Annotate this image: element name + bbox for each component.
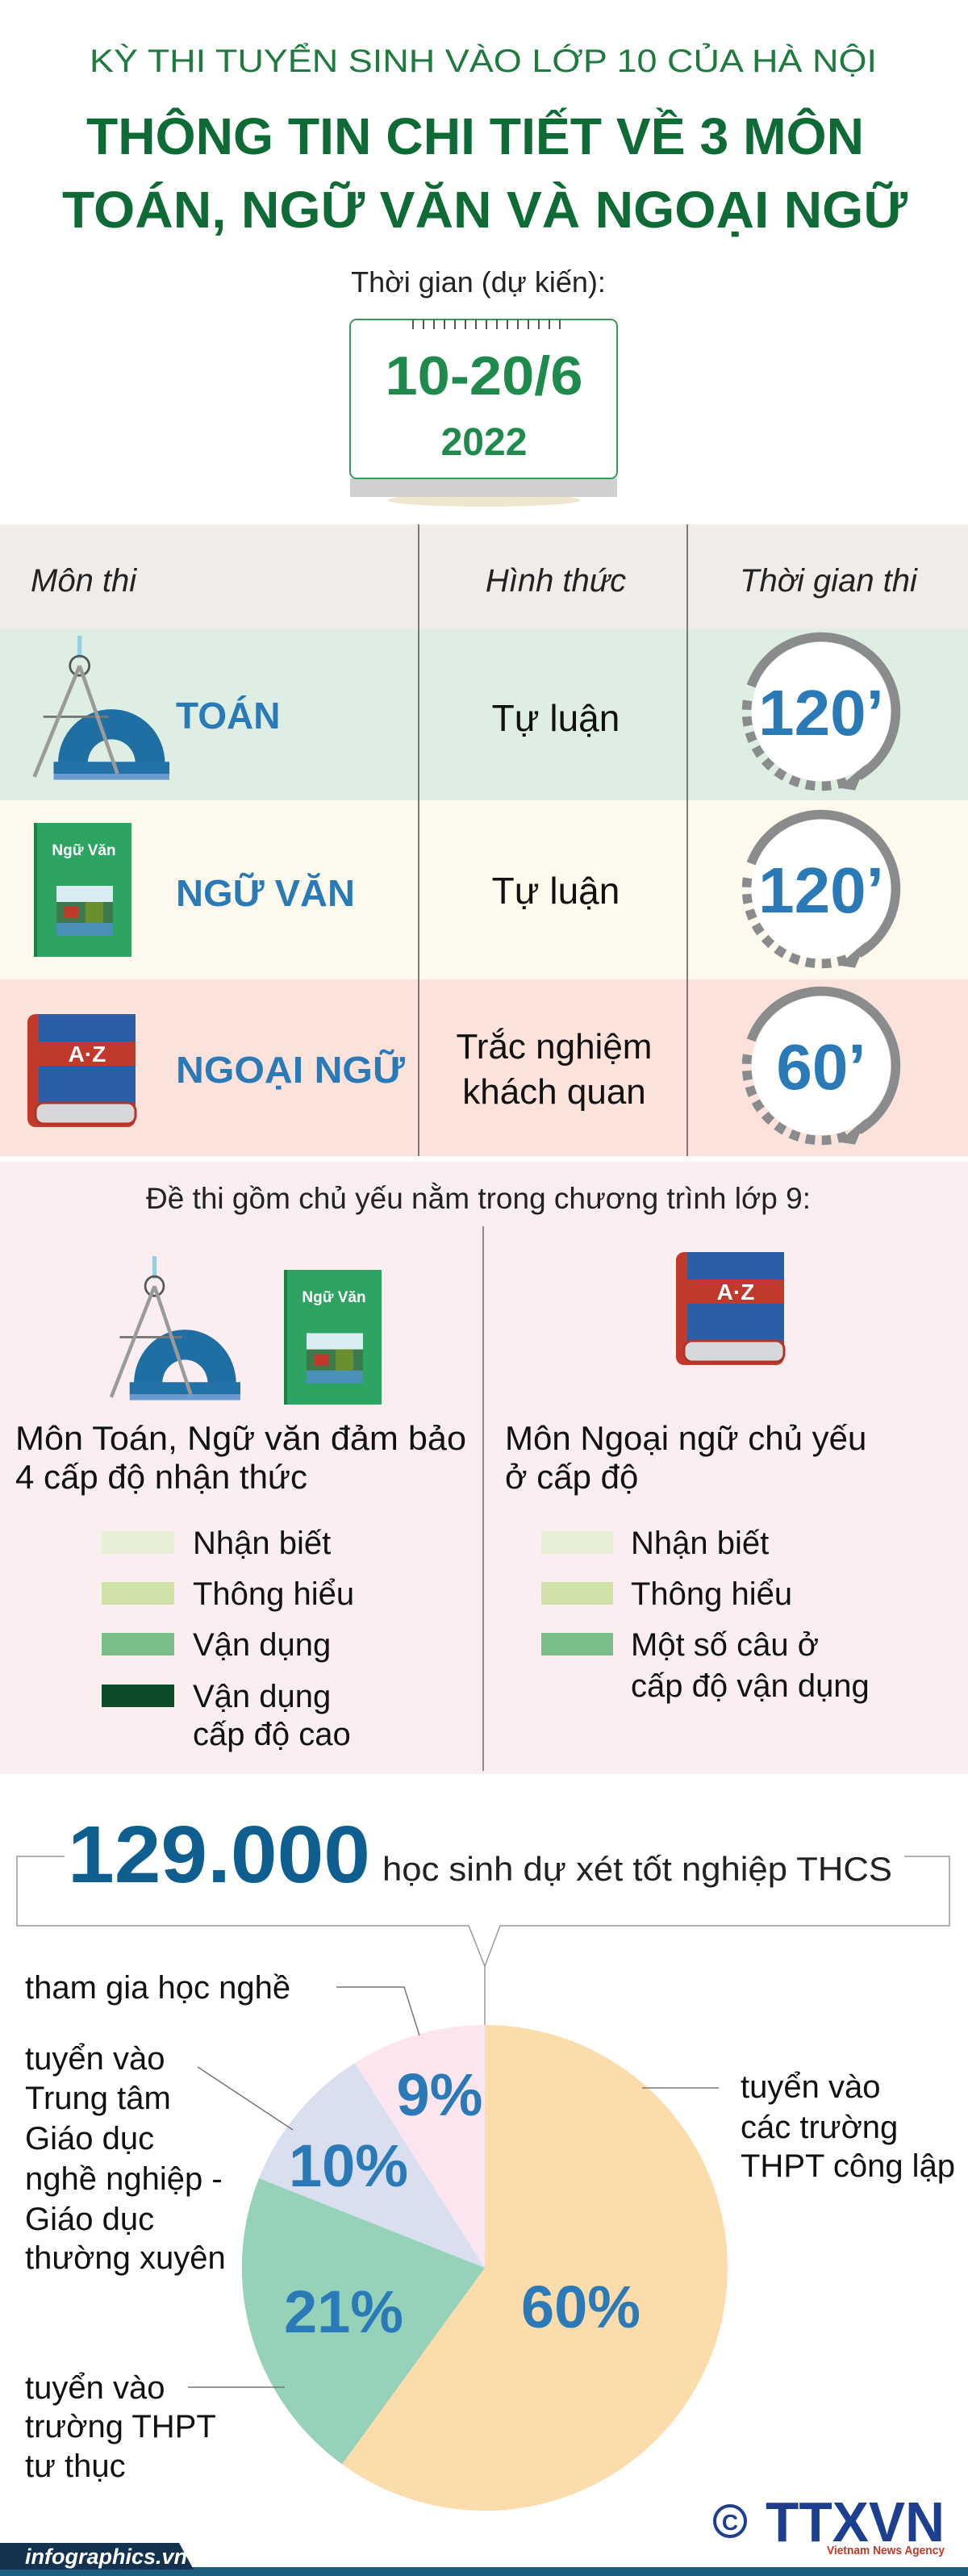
pie labels: [25, 1970, 955, 2484]
calendar: [350, 319, 617, 507]
table: [0, 524, 968, 1156]
pie chart: [242, 2025, 728, 2511]
title: TOÁN, NGỮ VĂN VÀ NGOẠI NGỮ: [62, 181, 908, 239]
pie labels: tư thục: [25, 2449, 126, 2484]
legend left: Vận dụng: [193, 1627, 331, 1663]
pie labels: THPT công lập: [741, 2148, 955, 2184]
row: Ngữ văn: NGỮ VĂN: [176, 872, 355, 914]
legend right: Một số câu ở: [631, 1627, 819, 1663]
footer: [0, 2543, 968, 2576]
legend left: Vận dụng: [193, 1679, 331, 1714]
right text: Môn Ngoại ngữ chủ yếu: [505, 1419, 866, 1457]
right text: ở cấp độ: [505, 1458, 638, 1496]
row: Ngữ văn: 120’: [758, 854, 884, 926]
pie labels: tuyển vào: [25, 2041, 165, 2077]
row: Ngữ văn: Tự luận: [492, 870, 620, 912]
logo: C: [722, 2510, 738, 2535]
logo: Vietnam News Agency: [827, 2544, 945, 2557]
pie labels: Giáo dục: [25, 2121, 154, 2156]
row: Ngoại ngữ: khách quan: [462, 1072, 646, 1112]
pie labels: tuyển vào: [25, 2370, 165, 2406]
table header: Hình thức: [486, 563, 626, 599]
right icon: [676, 1252, 784, 1365]
table header: Thời gian thi: [740, 563, 918, 599]
pie chart: 60%: [521, 2273, 640, 2340]
pie chart: 21%: [284, 2278, 403, 2345]
left icons: [111, 1256, 382, 1405]
footer: infographics.vn: [25, 2545, 187, 2569]
row: Toán: TOÁN: [176, 695, 281, 737]
row: Ngoại ngữ: Trắc nghiệm: [457, 1027, 652, 1067]
right text: [505, 1419, 866, 1496]
pie labels: trường THPT: [25, 2409, 216, 2444]
row: Toán: Tự luận: [492, 697, 620, 739]
pie labels: các trường: [741, 2110, 898, 2145]
row: Toán: 120’: [758, 677, 884, 749]
row: Ngữ văn: [34, 815, 895, 968]
pie labels: tuyển vào: [741, 2069, 880, 2105]
legend right: Nhận biết: [631, 1526, 769, 1561]
panel heading: Đề thi gồm chủ yếu nằm trong chương trình lớp 9:: [146, 1182, 811, 1215]
row: Ngoại ngữ: [27, 992, 895, 1145]
row: Ngoại ngữ: 60’: [776, 1031, 866, 1103]
table header: [31, 563, 918, 599]
pie chart: 10%: [289, 2132, 408, 2199]
calendar: 2022: [441, 421, 527, 464]
left text: [15, 1419, 466, 1496]
subtitle: KỲ THI TUYỂN SINH VÀO LỚP 10 CỦA HÀ NỘI: [90, 41, 877, 79]
legend left: cấp độ cao: [193, 1717, 351, 1752]
legend left: Thông hiểu: [193, 1576, 354, 1612]
pie labels: nghề nghiệp -: [25, 2161, 223, 2197]
logo: TTXVN: [766, 2490, 945, 2553]
headline number: học sinh dự xét tốt nghiệp THCS: [382, 1850, 892, 1888]
time label: Thời gian (dự kiến):: [351, 265, 606, 299]
pie labels: thường xuyên: [25, 2240, 226, 2276]
panel: exam levels: [0, 1162, 968, 1774]
left text: 4 cấp độ nhận thức: [15, 1458, 307, 1496]
table header: Môn thi: [31, 563, 137, 599]
legend right: cấp độ vận dụng: [631, 1668, 870, 1704]
title: [62, 106, 908, 239]
legend right: [541, 1526, 870, 1704]
row: Ngoại ngữ: NGOẠI NGỮ: [176, 1049, 406, 1091]
legend right: Thông hiểu: [631, 1576, 792, 1612]
pie chart: 9%: [397, 2061, 482, 2128]
headline number: [17, 1810, 949, 2025]
headline number: 129.000: [68, 1810, 370, 1900]
calendar: 10-20/6: [386, 345, 582, 407]
left text: Môn Toán, Ngữ văn đảm bảo: [15, 1419, 466, 1457]
title: THÔNG TIN CHI TIẾT VỀ 3 MÔN: [86, 106, 864, 165]
legend left: Nhận biết: [193, 1526, 331, 1561]
pie labels: Giáo dục: [25, 2202, 154, 2237]
pie labels: tham gia học nghề: [25, 1970, 290, 2006]
legend left: [102, 1526, 354, 1752]
row: Toán: [35, 636, 895, 791]
pie labels: Trung tâm: [25, 2081, 171, 2116]
